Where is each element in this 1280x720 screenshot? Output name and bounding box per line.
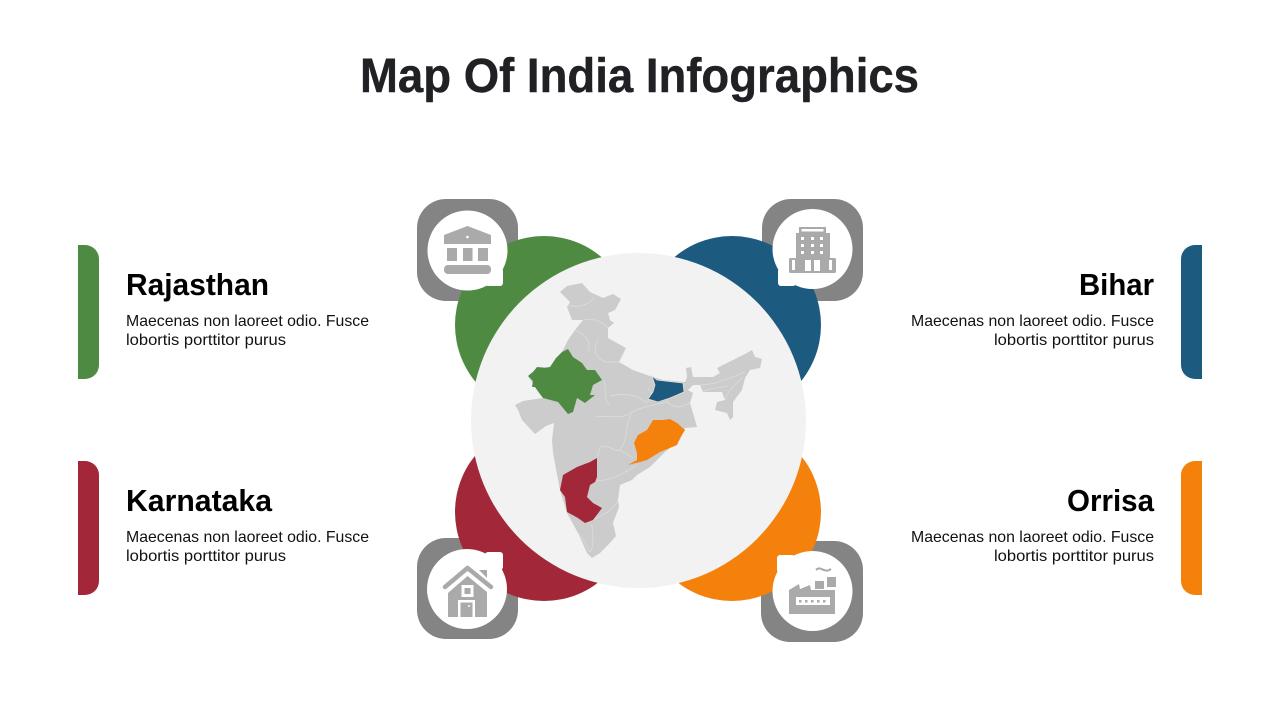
map of India <box>515 283 762 558</box>
icon: bank <box>428 210 508 290</box>
petal: red <box>455 423 633 601</box>
title: Map Of India Infographics <box>360 50 919 103</box>
side bar: Orrisa <box>1181 461 1202 595</box>
panel: Orrisa <box>911 461 1202 595</box>
text: Karnataka description: lobortis porttitor purus <box>126 548 286 565</box>
panel: Bihar <box>911 245 1202 379</box>
text: Orrisa description: lobortis porttitor purus <box>994 548 1154 565</box>
icon tile background: top right <box>762 199 863 301</box>
icon tile background: bottom left <box>417 538 518 639</box>
map: state borders <box>568 298 745 552</box>
text: Bihar description: lobortis porttitor purus <box>994 332 1154 349</box>
text: Karnataka description <box>126 529 369 565</box>
icon: office building <box>772 209 852 289</box>
text: Bihar description <box>911 313 1154 349</box>
icon: house <box>427 549 507 629</box>
text: Bihar description: Maecenas non laoreet odio. Fusce <box>911 313 1154 330</box>
text: Rajasthan description: Maecenas non laoreet odio. Fusce <box>126 313 369 330</box>
petal: orange <box>643 423 821 601</box>
text: Rajasthan description <box>126 313 369 349</box>
map: Bihar <box>648 376 684 402</box>
side bar: Karnataka <box>78 461 99 595</box>
heading: Bihar: Bihar <box>1079 267 1154 302</box>
petal: blue <box>643 236 821 414</box>
petal: green <box>455 236 633 414</box>
map: Karnataka <box>560 458 602 523</box>
heading: Orrisa: Orrisa <box>1067 483 1155 518</box>
side bar: Rajasthan <box>78 245 99 379</box>
map: Orrisa <box>628 419 685 465</box>
central circle <box>471 253 806 588</box>
text: Rajasthan description: lobortis porttitor purus <box>126 332 286 349</box>
heading: Karnataka: Karnataka <box>126 483 273 518</box>
map: Rajasthan <box>528 349 602 414</box>
icon tile background: top left <box>417 199 518 301</box>
icon: factory <box>772 551 852 631</box>
heading: Rajasthan: Rajasthan <box>126 267 269 302</box>
map: India landmass <box>515 283 762 558</box>
panel: Karnataka <box>78 461 369 595</box>
icon tile background: bottom right <box>761 541 863 642</box>
side bar: Bihar <box>1181 245 1202 379</box>
text: Karnataka description: Maecenas non laoreet odio. Fusce <box>126 529 369 546</box>
panel: Rajasthan <box>78 245 369 379</box>
text: Orrisa description <box>911 529 1154 565</box>
text: Orrisa description: Maecenas non laoreet odio. Fusce <box>911 529 1154 546</box>
